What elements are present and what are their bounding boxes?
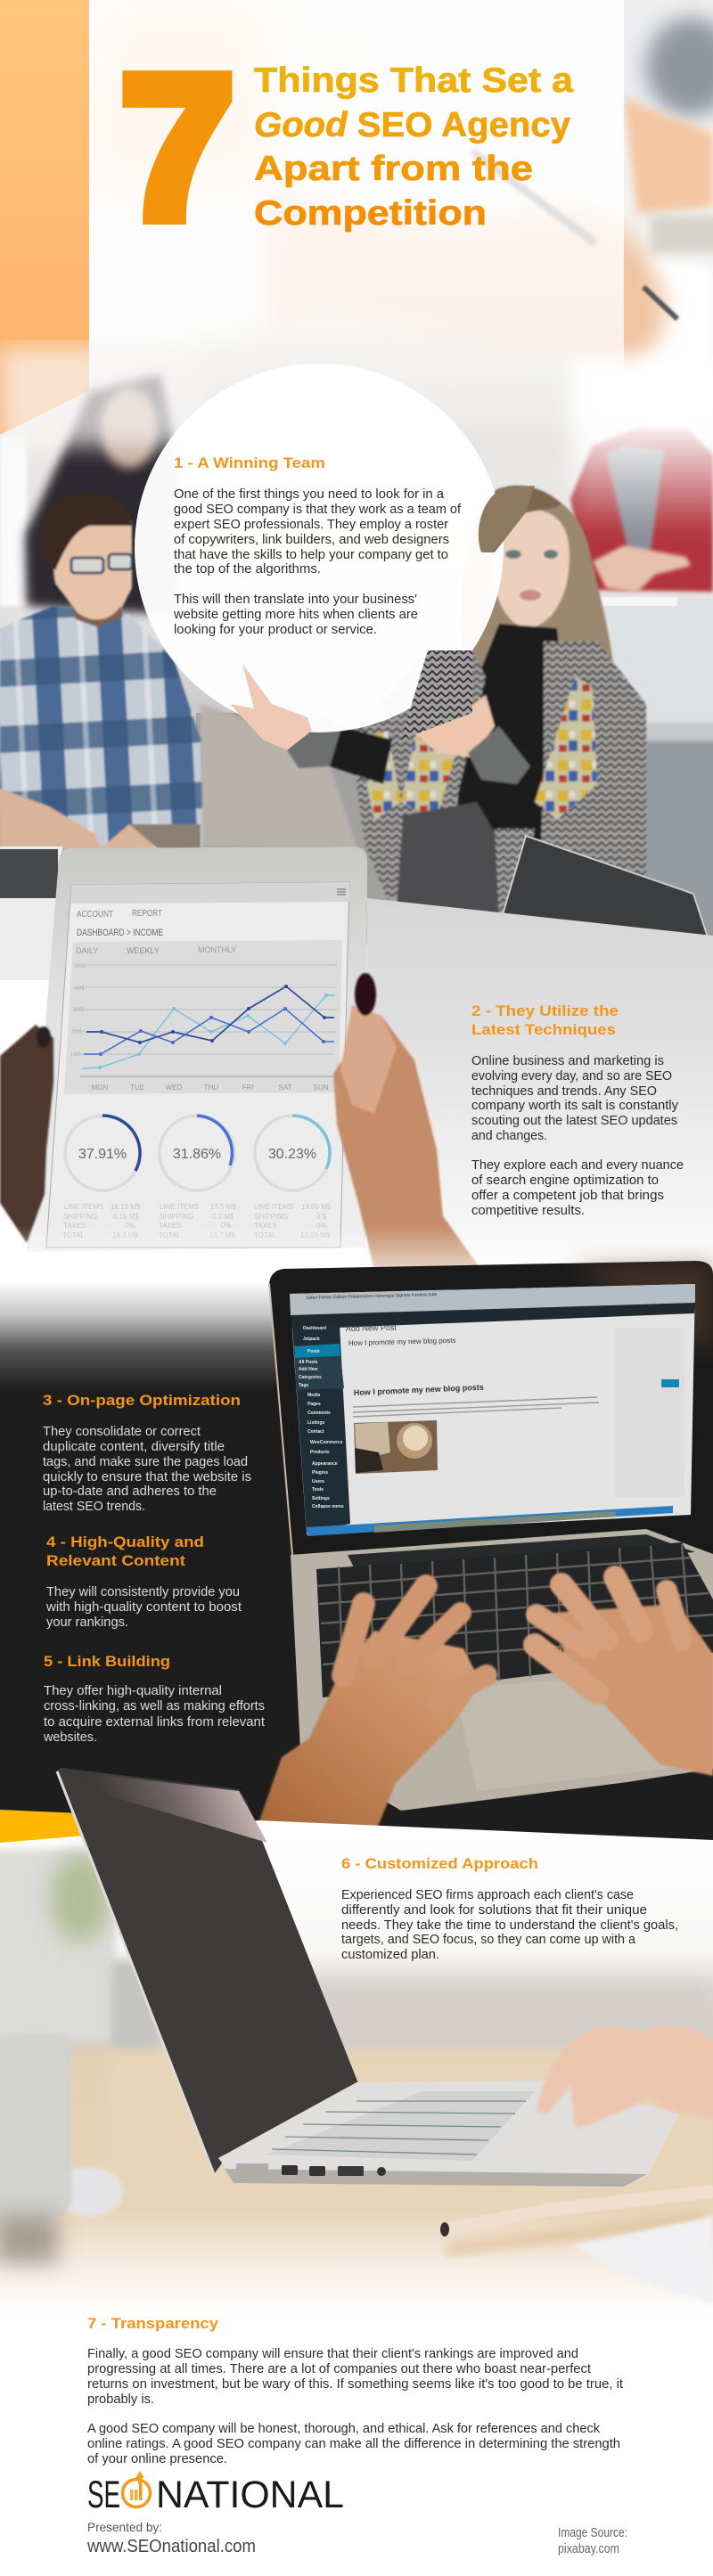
text: image source: Image Source: (558, 2526, 627, 2540)
text block: 4 - High-Quality and Relevant Content: 4 - High-Quality and (46, 1533, 204, 1550)
laptop screen: Pages (307, 1402, 321, 1407)
text block: 2 - They Utilize the Latest Techniques: and changes. (471, 1129, 547, 1143)
left hand (0, 1025, 53, 1243)
line chart (64, 940, 342, 1094)
laptop screen: Add New (299, 1367, 317, 1372)
line chart: 1M$ (70, 1052, 81, 1058)
panel: orange side strip (0, 0, 89, 435)
laptop screen: All Posts (299, 1360, 318, 1365)
logo: SEO National: SE (87, 2474, 120, 2516)
laptop screen: Categories (299, 1375, 322, 1380)
title text lines (254, 61, 573, 233)
table of small figures: SHIPPING (254, 1213, 288, 1221)
trousers (397, 802, 508, 918)
white speech circle (135, 364, 504, 732)
line chart: 4M$ (74, 986, 85, 992)
table of small figures: 16.3 M$ (112, 1231, 138, 1239)
line chart: SUN (314, 1084, 329, 1092)
text block: 7 - Transparency: returns on investment, but be wary of this. If something seems like it's too good to be true, it (87, 2377, 623, 2392)
laptop screen: Posts (307, 1349, 320, 1354)
table of small figures: 13.7 M$ (209, 1231, 235, 1239)
tablet screen: DASHBOARD > INCOME (77, 928, 163, 938)
laptop lid (269, 1261, 713, 1568)
text block: 7 - Transparency (87, 2315, 623, 2466)
icon: menu (337, 889, 346, 895)
table of small figures: TAXES (63, 1222, 86, 1230)
text block: 4 - High-Quality and Relevant Content: with high-quality content to boost (45, 1600, 242, 1615)
laptop screen: Dashboard (303, 1326, 326, 1331)
laptop screen (290, 1284, 695, 1536)
logo: SEO National: NATIONAL (156, 2474, 344, 2516)
hand overlapping the circle (230, 664, 312, 750)
text block: 7 - Transparency: of your online presence. (87, 2452, 227, 2466)
tablet screen: REPORT (132, 909, 162, 919)
donut: 31.86%: 31.86% (173, 1147, 221, 1162)
laptop screen: Safari Fichier Edition Présentation Historique Signets Fenêtre Aide (306, 1292, 438, 1301)
text block: 2 - They Utilize the Latest Techniques: of search engine optimization to (471, 1174, 659, 1188)
tablet body (27, 846, 367, 1252)
table of small figures: 0.2 M$ (212, 1213, 234, 1221)
laptop base and keyboard (291, 1529, 713, 1811)
laptop screen: Collapse menu (312, 1504, 344, 1509)
text block: 7 - Transparency: progressing at all times. There are a lot of companies out there who boast near-perfect (87, 2362, 591, 2376)
text block: 5 - Link Building (43, 1653, 265, 1745)
pen tip beyond veil (643, 287, 677, 319)
line chart: 2M$ (71, 1030, 82, 1035)
text block: 1 - A Winning Team (173, 454, 462, 637)
line chart: WEEKLY (127, 946, 160, 955)
text block: 2 - They Utilize the Latest Techniques: Latest Techniques (471, 1021, 616, 1038)
laptop screen: Add New Post (346, 1323, 397, 1333)
text block: 3 - On-page Optimization: 3 - On-page Optimization (43, 1392, 241, 1409)
line chart: 5M$ (75, 964, 86, 969)
text block: 4 - High-Quality and Relevant Content (45, 1533, 242, 1630)
table of small figures: TOTAL (159, 1231, 182, 1239)
table of small figures: 0% (221, 1222, 232, 1230)
text block: 2 - They Utilize the Latest Techniques: Online business and marketing is (471, 1054, 664, 1068)
text: presented by (86, 2520, 256, 2556)
laptop screen: Products (310, 1450, 330, 1455)
line chart: MON (92, 1084, 109, 1092)
laptop screen: Users (312, 1479, 324, 1484)
text block: 2 - They Utilize the Latest Techniques: scouting out the latest SEO updates (471, 1114, 677, 1128)
table of small figures: 13.00 M$ (300, 1231, 331, 1239)
text block: 1 - A Winning Team: One of the first things you need to look for in a (174, 487, 445, 502)
pen and notebook (440, 2192, 713, 2303)
line chart: WED (166, 1084, 183, 1092)
text block: 3 - On-page Optimization: quickly to ensure that the website is (43, 1470, 251, 1484)
panel: dark background (0, 1283, 713, 1844)
table of small figures: SHIPPING (160, 1213, 193, 1221)
woman's hair overlapping the circle (479, 486, 535, 552)
window and plant (0, 1849, 156, 2076)
text block: 7 - Transparency: A good SEO company will be honest, thorough, and ethical. Ask for references and check (87, 2422, 601, 2436)
text block: 6 - Customized Approach: customized plan. (341, 1948, 439, 1962)
laptop screen: Appearance (312, 1461, 338, 1467)
text block: 2 - They Utilize the Latest Techniques (471, 1002, 684, 1218)
donut: 30.23% (255, 1116, 330, 1190)
line chart: SAT (279, 1084, 292, 1092)
text block: 6 - Customized Approach: Experienced SEO firms approach each client's case (341, 1888, 634, 1902)
text block: 4 - High-Quality and Relevant Content: Relevant Content (46, 1552, 185, 1569)
laptop screen: How I promote my new blog posts (348, 1337, 456, 1347)
table of small figures: 16.15 M$ (111, 1203, 141, 1211)
table of small figures: 0% (125, 1222, 135, 1230)
text block: 4 - High-Quality and Relevant Content: They will consistently provide you (46, 1585, 240, 1599)
text block: 3 - On-page Optimization: They consolidate or correct (43, 1425, 201, 1439)
photo: team meeting (0, 348, 713, 953)
table of small figures: TOTAL (62, 1231, 86, 1239)
laptop screen: WooCommerce (310, 1440, 343, 1445)
text block: 7 - Transparency: Finally, a good SEO company will ensure that their client's rankings are improved and (87, 2347, 578, 2361)
table of small figures: 0.15 M$ (113, 1213, 139, 1221)
tablet screen: ACCOUNT (77, 910, 113, 920)
text block: 2 - They Utilize the Latest Techniques: competitive results. (471, 1204, 585, 1218)
typing hands (257, 1577, 713, 1828)
coffee photo on screen (354, 1420, 438, 1474)
text block: 5 - Link Building: cross-linking, as well as making efforts (44, 1699, 265, 1713)
text block: 2 - They Utilize the Latest Techniques: evolving every day, and so are SEO (471, 1069, 672, 1084)
laptop lid (57, 1768, 358, 2174)
white fade under tablet (0, 1225, 713, 1292)
man with glasses and plaid shirt (0, 493, 203, 855)
text block: 2 - They Utilize the Latest Techniques: 2 - They Utilize the (471, 1002, 619, 1019)
table of small figures: 0 $ (316, 1213, 327, 1221)
coffee cup and saucer (0, 2033, 123, 2263)
text block: 2 - They Utilize the Latest Techniques: techniques and trends. Any SEO (471, 1084, 657, 1099)
woman in the background (0, 348, 205, 615)
table of small figures: 0% (316, 1222, 327, 1230)
text block: 1 - A Winning Team: of copywriters, link builders, and web designers (174, 533, 449, 547)
text block: 6 - Customized Approach: differently and look for solutions that fit their unique (341, 1903, 647, 1918)
panel: translucent white title veil (89, 0, 624, 463)
title: 7 Things That Set a Good SEO Agency Apart from the Competition (121, 35, 573, 261)
text block: 3 - On-page Optimization (43, 1392, 251, 1514)
text block: 7 - Transparency: 7 - Transparency (87, 2315, 219, 2332)
line chart: 3M$ (73, 1008, 84, 1013)
text block: 6 - Customized Approach (341, 1855, 678, 1962)
title text lines: Apart from the (254, 150, 533, 188)
laptop screen: How I promote my new blog posts (354, 1383, 484, 1397)
laptop screen: Plugins (312, 1470, 328, 1476)
text block: 5 - Link Building: to acquire external links from relevant (44, 1715, 265, 1730)
text: image source (558, 2526, 627, 2556)
table of small figures (62, 1203, 332, 1239)
sofa and pillow (196, 704, 713, 949)
text block: 6 - Customized Approach: needs. They take the time to understand the client's goals, (341, 1918, 678, 1933)
text block: 1 - A Winning Team: 1 - A Winning Team (174, 454, 325, 471)
person in red sweater (570, 356, 713, 593)
table of small figures: 13.5 M$ (210, 1203, 236, 1211)
table of small figures: 13.00 M$ (301, 1203, 332, 1211)
laptop base (218, 2081, 679, 2187)
dark laptop on the woman's lap (499, 836, 713, 953)
left hand (257, 1631, 481, 1828)
logo: SEO National (87, 2471, 344, 2516)
hand on trackpad (537, 2025, 713, 2128)
table of small figures: LINE ITEMS (254, 1203, 293, 1211)
donut: 37.91%: 37.91% (78, 1147, 127, 1162)
line chart: THU (204, 1084, 218, 1092)
line chart: TUE (130, 1084, 144, 1092)
text block: 3 - On-page Optimization: tags, and make sure the pages load (43, 1455, 248, 1469)
text block: 3 - On-page Optimization: up-to-date and adheres to the (43, 1484, 217, 1499)
line chart: DAILY (76, 946, 98, 955)
table of small figures: LINE ITEMS (64, 1203, 103, 1211)
laptop screen: Settings (312, 1496, 330, 1501)
text block: 2 - They Utilize the Latest Techniques: offer a competent job that brings (471, 1189, 664, 1203)
laptop screen: Tools (312, 1487, 324, 1492)
jacket overlap (401, 650, 472, 740)
laptop screen: Listings (307, 1420, 324, 1426)
donut: 30.23%: 30.23% (268, 1147, 316, 1162)
title text lines: Things That Set a (254, 61, 573, 100)
text block: 3 - On-page Optimization: latest SEO trends. (43, 1500, 145, 1514)
text block: 1 - A Winning Team: website getting more hits when clients are (173, 608, 418, 622)
text block: 2 - They Utilize the Latest Techniques: company worth its salt is constantly (471, 1099, 679, 1113)
text block: 7 - Transparency: probably is. (87, 2392, 154, 2407)
text block: 5 - Link Building: websites. (43, 1730, 97, 1745)
donut: 37.91% (65, 1116, 140, 1190)
panel: light background for section 2 (367, 898, 713, 1283)
text block: 6 - Customized Approach: targets, and SEO focus, so they can come up with a (341, 1933, 636, 1947)
laptop screen: Tags (299, 1383, 309, 1388)
text block: 4 - High-Quality and Relevant Content: your rankings. (46, 1615, 128, 1630)
text block: 7 - Transparency: online ratings. A good SEO company can make all the difference in determining the strength (87, 2437, 620, 2451)
photo: laptop with WordPress editor and typing hands (257, 1261, 713, 1828)
text block: 5 - Link Building: They offer high-quality internal (44, 1684, 222, 1698)
text block: 5 - Link Building: 5 - Link Building (44, 1653, 170, 1670)
tablet screen (46, 882, 349, 1247)
title text lines: Competition (254, 194, 487, 233)
table of small figures: TAXES (159, 1222, 182, 1230)
icon: rising bars in a circle (123, 2471, 150, 2507)
laptop screen: Contact (307, 1429, 324, 1435)
text block: 1 - A Winning Team: expert SEO professionals. They employ a roster (174, 518, 448, 532)
text block: 1 - A Winning Team: This will then translate into your business' (174, 593, 417, 607)
line chart: MONTHLY (198, 945, 236, 954)
big numeral 7: 7 (121, 35, 234, 261)
laptop screen: Comments (307, 1411, 331, 1416)
photo: tablet with dashboard held in two hands (0, 846, 713, 1292)
table of small figures: TOTAL (254, 1231, 277, 1239)
right hand (333, 973, 481, 1270)
photo: faded hand writing with a pen (0, 0, 713, 481)
text block: 6 - Customized Approach: 6 - Customized Approach (341, 1855, 538, 1872)
laptop screen: Jetpack (303, 1337, 320, 1342)
line chart: FRI (242, 1084, 253, 1092)
table of small figures: SHIPPING (63, 1213, 97, 1221)
text: image source: pixabay.com (558, 2542, 619, 2556)
text block: 1 - A Winning Team: the top of the algorithms. (174, 562, 321, 577)
title text lines: Good SEO Agency (254, 106, 570, 144)
text block: 2 - They Utilize the Latest Techniques: They explore each and every nuance (471, 1158, 684, 1173)
woman in patterned jacket (283, 486, 646, 918)
donut: 31.86% (160, 1116, 234, 1190)
photo: laptop on a wooden desk (0, 1768, 713, 2326)
text block: 1 - A Winning Team: looking for your product or service. (174, 623, 377, 637)
table of small figures: LINE ITEMS (160, 1203, 199, 1211)
text: presented by: Presented by: (87, 2520, 162, 2534)
yellow accent band (0, 1810, 80, 1843)
text: presented by: www.SEOnational.com (86, 2537, 256, 2556)
left floor with keyboard behind tablet (0, 846, 62, 1265)
table of small figures: TAXES (254, 1222, 277, 1230)
right hand (553, 1604, 713, 1776)
laptop screen: Media (307, 1393, 320, 1398)
text block: 1 - A Winning Team: good SEO company is that they work as a team of (174, 503, 462, 517)
text block: 3 - On-page Optimization: duplicate content, diversify title (43, 1440, 225, 1454)
text block: 1 - A Winning Team: that have the skills to help your company get to (174, 548, 448, 562)
